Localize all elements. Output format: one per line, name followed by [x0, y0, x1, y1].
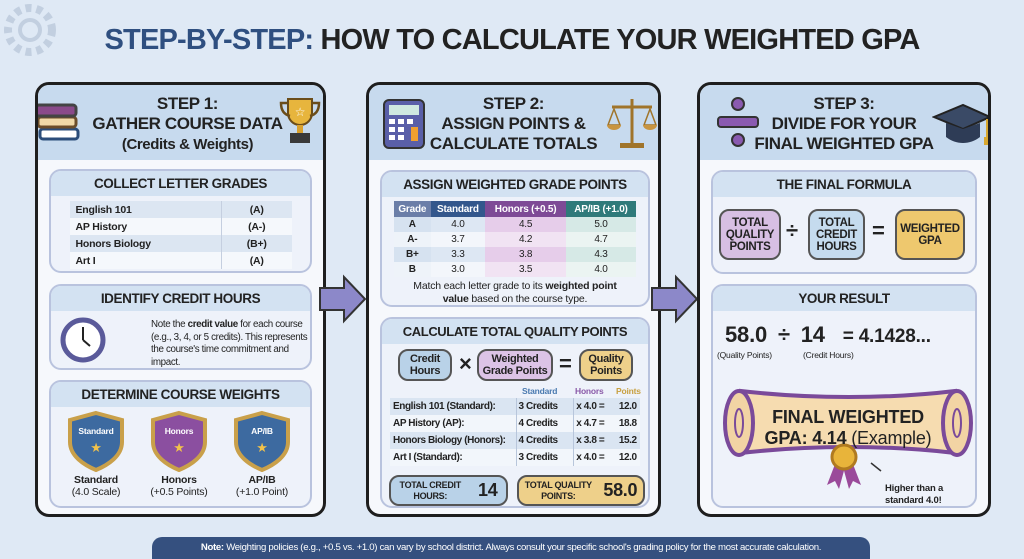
icon: divide: [717, 97, 759, 147]
scroll: [723, 388, 973, 489]
box: final formula: =: [872, 218, 885, 243]
box: final formula: HOURS: [816, 240, 856, 252]
arrow: step 2 to 3: [651, 274, 697, 324]
box: final formula: WEIGHTED: [900, 222, 960, 234]
icon: clock: [60, 318, 106, 362]
quality points table: 3 Credits: [518, 452, 558, 463]
shields: Standard: [78, 426, 114, 436]
match text: Match each letter grade to its weighted point: [413, 280, 617, 292]
icon: graduation cap: [932, 104, 988, 145]
quality points table: x 4.0 =: [576, 401, 604, 412]
grade points table: Grade: [398, 204, 426, 214]
grade points table: Honors (+0.5): [495, 204, 556, 214]
formula pills: Hours: [410, 365, 440, 377]
final GPA text: [765, 407, 931, 448]
box: determine course weights: [49, 380, 312, 508]
note: higher than standard: standard 4.0!: [885, 495, 942, 506]
icon: calculator: [383, 99, 425, 149]
box: collect letter grades: COLLECT LETTER GRADES: [94, 176, 267, 191]
total quality points: [517, 475, 645, 506]
formula pills: Credit: [410, 353, 440, 365]
grade points table: A: [409, 219, 416, 230]
grade points table: 4.2: [519, 234, 532, 245]
quality points table: x 3.8 =: [576, 435, 604, 446]
box: final formula: CREDIT: [816, 228, 857, 240]
grades table: (A): [250, 204, 264, 216]
step 3 heading: STEP 3:: [813, 94, 875, 113]
grades table: English 101: [76, 204, 132, 216]
formula pills: [398, 349, 633, 381]
step 2 heading: CALCULATE TOTALS: [430, 134, 597, 153]
formula pills: =: [559, 351, 572, 376]
quality points table: 12.0: [619, 401, 637, 412]
box: identify credit hours: [49, 284, 312, 370]
shields: [68, 410, 290, 498]
grade points table: AP/IB (+1.0): [574, 204, 628, 214]
shields: AP/IB: [251, 426, 273, 436]
step 3 heading: DIVIDE FOR YOUR: [772, 114, 916, 133]
step 1 heading: GATHER COURSE DATA: [92, 114, 283, 133]
final GPA text: GPA: 4.14 (Example): [765, 428, 931, 448]
step 1 heading: (Credits & Weights): [122, 136, 253, 153]
grades table: (A-): [248, 220, 265, 232]
box: calculate total quality points: Points: [616, 386, 641, 396]
step 3 heading: [700, 85, 988, 160]
total quality points: POINTS:: [541, 490, 576, 500]
grade points table: B+: [406, 249, 419, 260]
grade points table: 4.7: [594, 234, 608, 245]
grade points table: 3.8: [519, 249, 532, 260]
box: your result: (Quality Points): [717, 350, 772, 360]
grade points table: 4.0: [594, 264, 608, 275]
shields: (+1.0 Point): [236, 486, 288, 498]
icon: trophy: [280, 98, 320, 143]
shields: Honors: [161, 474, 197, 486]
box: final formula: ÷: [786, 218, 798, 243]
quality points table: Art I (Standard):: [393, 452, 462, 463]
shields: ★: [90, 440, 102, 455]
box: your result: [711, 284, 977, 508]
quality points table: 15.2: [619, 435, 637, 446]
column labels: Standard: [522, 386, 557, 396]
grades table: (A): [250, 254, 264, 266]
total quality points: 58.0: [603, 480, 637, 500]
panel: step 2: [366, 82, 661, 517]
formula pills: Weighted: [492, 353, 538, 365]
arrow: step 1 to 2: [319, 274, 366, 324]
quality points table: 4 Credits: [518, 418, 558, 429]
final GPA text: FINAL WEIGHTED: [772, 407, 924, 427]
grades table: AP History: [76, 220, 127, 232]
total credit hours: [389, 475, 508, 506]
box: final formula: [711, 170, 977, 274]
grade points table: 3.7: [451, 234, 465, 245]
formula pills: [719, 209, 781, 260]
note: higher than standard: [885, 483, 944, 506]
shields: AP/IB: [248, 474, 276, 486]
formula pills: Grade Points: [483, 365, 547, 377]
quality points table: English 101 (Standard):: [393, 401, 496, 412]
total credit hours: HOURS:: [413, 490, 447, 500]
quality points table: 18.8: [619, 418, 637, 429]
formula pills: ×: [459, 351, 472, 376]
total credit hours: 14: [478, 480, 497, 500]
step 1 heading: STEP 1:: [157, 94, 218, 113]
icon: trophy: ☆: [295, 105, 305, 119]
box: determine course weights: DETERMINE COURSE WEIGHTS: [81, 387, 280, 402]
icon: scales: [607, 99, 657, 148]
shields: (4.0 Scale): [72, 486, 120, 498]
match text: [413, 280, 617, 305]
grade points table: 3.0: [451, 264, 465, 275]
panel: step 3: [697, 82, 991, 517]
grade points table: [394, 201, 636, 277]
footer note: [152, 537, 870, 559]
quality points table: [390, 398, 640, 466]
grade points table: A-: [407, 234, 417, 245]
grades table: Art I: [76, 254, 96, 266]
grade points table: B: [409, 264, 416, 275]
grades table: [70, 201, 292, 269]
grade points table: 4.5: [519, 219, 532, 230]
total credit hours: TOTAL CREDIT: [400, 480, 461, 490]
box: collect letter grades: [49, 169, 312, 273]
box: final formula: THE FINAL FORMULA: [777, 177, 911, 192]
box: calculate total quality points: [380, 317, 650, 508]
box: calculate total quality points: Honors: [575, 386, 604, 396]
box: identify credit hours: IDENTIFY CREDIT HOURS: [101, 291, 260, 306]
quality points table: x 4.7 =: [576, 418, 604, 429]
footer note: Note: Weighting policies (e.g., +0.5 vs. +1.0) can vary by school district. Always consult your specific school's grading policy for the most accurate calculation.: [201, 542, 821, 553]
box: final formula: GPA: [918, 234, 942, 246]
step 2 heading: ASSIGN POINTS &: [441, 114, 586, 133]
grade points table: 4.0: [451, 219, 465, 230]
shields: Honors: [165, 426, 194, 436]
note: higher than standard: Higher than a: [885, 483, 943, 494]
step 2 heading: STEP 2:: [483, 94, 544, 113]
title: STEP-BY-STEP: HOW TO CALCULATE YOUR WEIGHTED GPA: [104, 24, 919, 56]
panel: step 1: [35, 82, 326, 517]
quality points table: AP History (AP):: [393, 418, 464, 429]
quality points table: Honors Biology (Honors):: [393, 435, 506, 446]
shields: Standard: [74, 474, 118, 486]
shields: (+0.5 Points): [150, 486, 208, 498]
step 3 heading: FINAL WEIGHTED GPA: [754, 134, 934, 153]
credit hours text: Note the credit value for each course (e.g., 3, 4, or 5 credits). This represents the course's time commitment and impact.: [151, 319, 307, 368]
quality points table: 12.0: [619, 452, 637, 463]
box: your result: YOUR RESULT: [798, 291, 890, 306]
step 1 heading: [38, 85, 323, 160]
box: assign weighted grade points: [380, 170, 650, 307]
grade points table: Standard: [437, 204, 479, 214]
decorative gear left: [4, 4, 56, 56]
grade points table: 5.0: [594, 219, 608, 230]
grade points table: 3.5: [519, 264, 532, 275]
shields: ★: [173, 440, 185, 455]
grade points table: 4.3: [594, 249, 608, 260]
box: final formula: TOTAL: [819, 216, 854, 228]
step 2 heading: [369, 85, 658, 160]
grade points table: 3.3: [451, 249, 465, 260]
icon: books: [38, 104, 80, 140]
result equation: 58.0 ÷ 14 = 4.1428...: [725, 322, 931, 347]
quality points table: 3 Credits: [518, 401, 558, 412]
formula pills: TOTAL: [732, 216, 768, 228]
match text: value based on the course type.: [443, 293, 587, 305]
formula pills: QUALITY: [726, 228, 774, 240]
quality points table: x 4.0 =: [576, 452, 604, 463]
formula pills: POINTS: [729, 240, 770, 252]
grades table: Honors Biology: [76, 238, 151, 250]
shields: ★: [256, 440, 268, 455]
total quality points: TOTAL QUALITY: [525, 480, 592, 490]
box: calculate total quality points: CALCULATE TOTAL QUALITY POINTS: [403, 324, 627, 339]
formula pills: Quality: [588, 353, 624, 365]
grades table: (B+): [247, 238, 267, 250]
formula pills: Points: [590, 365, 622, 377]
box: your result: (Credit Hours): [803, 350, 854, 360]
box: assign weighted grade points: ASSIGN WEIGHTED GRADE POINTS: [403, 177, 627, 192]
quality points table: 4 Credits: [518, 435, 558, 446]
